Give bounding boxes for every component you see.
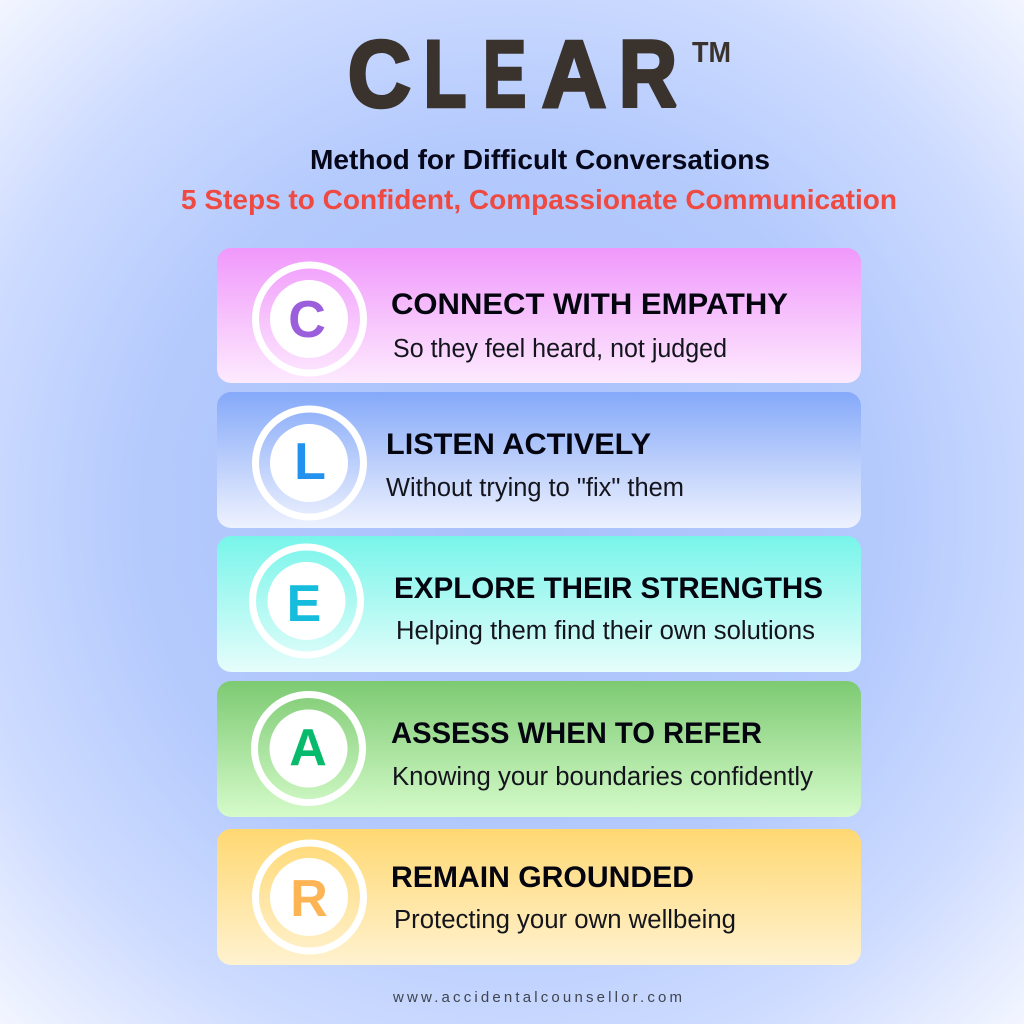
tagline: 5 Steps to Confident, Compassionate Communication [181,184,897,215]
icon: letter E badge: E [287,575,321,633]
text: remain description: Protecting your own wellbeing [394,906,736,934]
subtitle: Method for Difficult Conversations [310,144,770,175]
text: connect description: So they feel heard, not judged [393,335,727,363]
heading: remain: REMAIN GROUNDED [391,861,694,894]
footer url: www.accidentalcounsellor.com [392,989,682,1006]
title: C [348,21,411,127]
icon: letter E badge [252,547,360,655]
title: L [424,21,466,127]
title: R [619,21,677,127]
title: TM [692,37,731,69]
panel: C connect with empathy [217,248,861,383]
text: explore description: Helping them find their own solutions [396,617,815,645]
icon: letter C badge: C [288,291,326,349]
heading: explore: EXPLORE THEIR STRENGTHS [394,572,823,605]
icon: letter A badge [254,694,362,802]
text: assess description: Knowing your boundaries confidently [392,763,813,791]
text: listen description: Without trying to "fix" them [386,474,684,502]
title: E [483,21,526,127]
icon: letter R badge [256,843,364,951]
panel: L listen actively [217,392,861,528]
icon: letter A badge: A [289,719,327,777]
icon: letter L badge [256,409,364,517]
icon: letter L badge: L [294,433,326,491]
panel: R remain grounded [217,829,861,965]
icon: letter R badge: R [290,870,328,928]
heading: assess: ASSESS WHEN TO REFER [391,717,762,750]
panel: E explore strengths [217,536,861,672]
heading: connect: CONNECT WITH EMPATHY [391,288,788,321]
icon: letter C badge [256,265,364,373]
heading: listen: LISTEN ACTIVELY [386,428,651,461]
title: A [542,21,606,127]
panel: A assess when to refer [217,681,861,817]
title [348,21,731,127]
